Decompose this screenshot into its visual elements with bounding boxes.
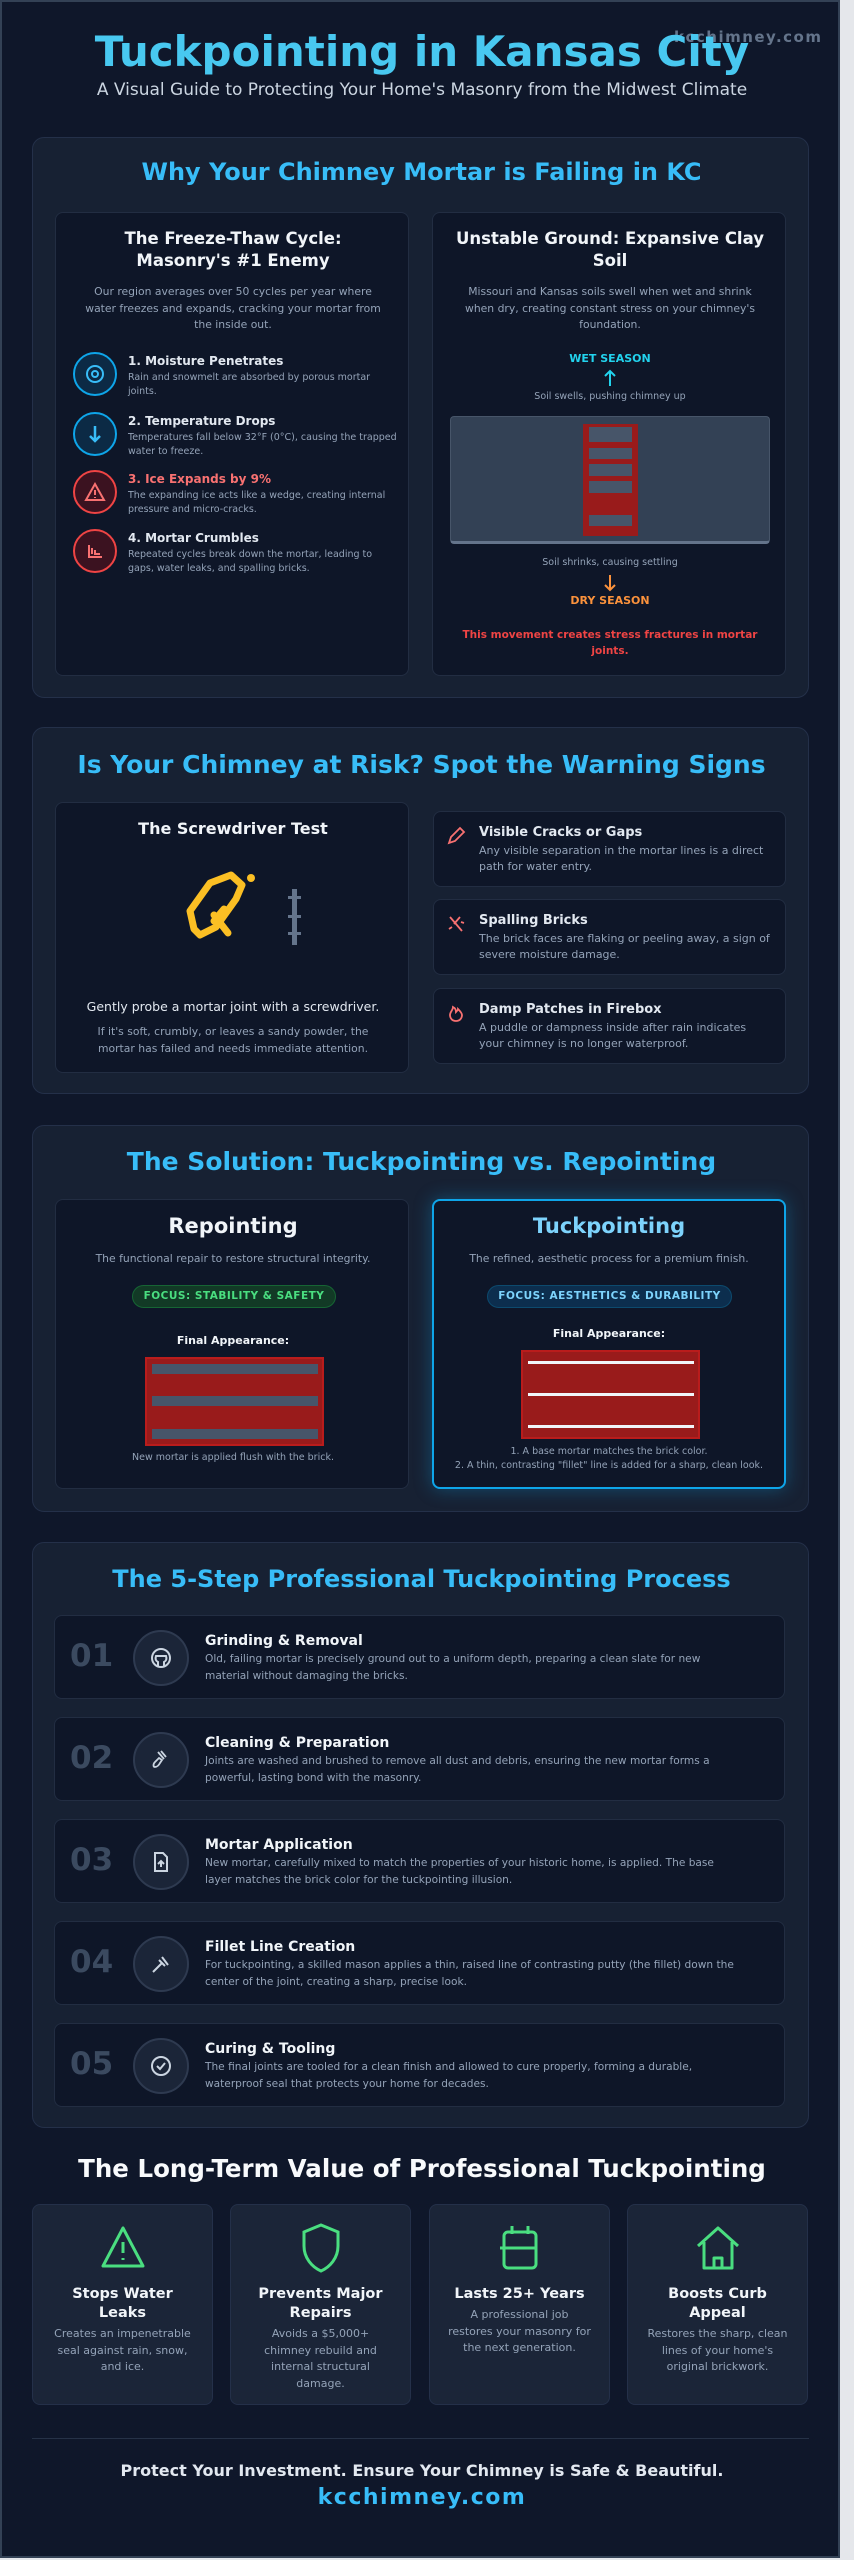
step 3 desc: The expanding ice acts like a wedge, creating internal pressure and micro-cracks. — [128, 490, 385, 515]
step 2 desc: Temperatures fall below 32°F (0°C), causing the trapped water to freeze. — [128, 432, 397, 457]
card: expansive clay — [432, 212, 786, 676]
badge: stability — [132, 1285, 336, 1308]
icon: grinder — [133, 1630, 189, 1686]
freeze-thaw description: Our region averages over 50 cycles per year where — [94, 285, 372, 298]
repointing title: Repointing — [168, 1214, 298, 1238]
screwdriver result: If it's soft, crumbly, or leaves a sandy powder, the — [98, 1025, 368, 1038]
step 4 desc: Repeated cycles break down the mortar, leading to gaps, water leaks, and spalling bricks. — [128, 549, 372, 574]
step 02: 02 — [70, 1740, 113, 1776]
icon: shield — [302, 2223, 340, 2273]
clay description — [465, 285, 755, 331]
clay description: when dry, creating constant stress on your chimney's — [465, 302, 755, 314]
benefit: curb appeal: lines of your home's — [662, 2344, 773, 2356]
card: freeze-thaw — [55, 212, 409, 676]
final appearance label: Final Appearance: — [553, 1327, 665, 1340]
benefit: water leaks: Stops Water — [72, 2286, 173, 2302]
freeze-thaw title: The Freeze-Thaw Cycle: — [124, 229, 342, 248]
step 4 title: 4. Mortar Crumbles — [128, 531, 259, 545]
icon: target — [73, 352, 117, 396]
heading: warning signs: Is Your Chimney at Risk? Spot the Warning Signs — [77, 750, 766, 779]
step 3 title: 3. Ice Expands by 9% — [128, 472, 271, 486]
heading: solution: The Solution: Tuckpointing vs. Repointing — [127, 1147, 716, 1176]
step 05 — [54, 2023, 785, 2107]
card: tuckpointing — [432, 1199, 786, 1489]
repointing desc: The functional repair to restore structural integrity. — [96, 1252, 370, 1265]
clay title: Unstable Ground: Expansive Clay — [456, 229, 764, 248]
stress warning: This movement creates stress fractures in mortar — [463, 629, 757, 641]
benefit: repairs: Prevents Major — [258, 2286, 383, 2302]
wet season label: WET SEASON — [569, 352, 651, 365]
clay description: Missouri and Kansas soils swell when wet and shrink — [468, 285, 752, 298]
step 05: 05 — [70, 2046, 113, 2082]
step 05: Curing & Tooling — [205, 2041, 335, 2057]
freeze-thaw title — [124, 229, 342, 270]
sign: spalling — [433, 899, 786, 975]
step 01: Old, failing mortar is precisely ground out to a uniform depth, preparing a clean slate for new material without damaging the bricks. — [205, 1653, 700, 1682]
icon: warning — [101, 2226, 144, 2268]
clay description: foundation. — [579, 318, 641, 331]
icon: broken — [448, 916, 464, 932]
arrow down — [604, 575, 616, 592]
arrow up — [604, 370, 616, 386]
sign: spalling: The brick faces are flaking or peeling away, a sign of severe moisture damage. — [479, 932, 770, 961]
panel: 5-step process — [32, 1542, 809, 2128]
heading: why failing: Why Your Chimney Mortar is Failing in KC — [141, 158, 702, 186]
benefit: water leaks — [32, 2204, 213, 2405]
brick: fillet lines — [521, 1350, 700, 1439]
card: repointing — [55, 1199, 409, 1489]
freeze-thaw description — [85, 285, 381, 331]
sign: cracks — [433, 811, 786, 887]
benefit: repairs: Repairs — [290, 2305, 351, 2321]
freeze-thaw description: the inside out. — [194, 318, 272, 331]
soil diagram — [450, 416, 770, 544]
benefit: water leaks: seal against rain, snow, — [57, 2344, 188, 2356]
heading: long-term value: The Long-Term Value of Professional Tuckpointing — [78, 2154, 766, 2183]
badge: aesthetics: FOCUS: AESTHETICS & DURABILITY — [498, 1290, 721, 1302]
sign: damp: Damp Patches in Firebox — [479, 1002, 662, 1017]
title: Tuckpointing in Kansas City — [95, 27, 749, 76]
step 03 — [54, 1819, 785, 1903]
sign: damp: A puddle or dampness inside after rain indicates your chimney is no longer waterproof. — [479, 1021, 746, 1050]
step 01: 01 — [70, 1638, 113, 1674]
icon: warning — [73, 470, 117, 514]
brick: flush mortar — [145, 1357, 324, 1446]
step 1 desc: Rain and snowmelt are absorbed by porous mortar joints. — [128, 372, 370, 397]
step 01: Grinding & Removal — [205, 1633, 363, 1649]
benefit: lasts — [429, 2204, 610, 2405]
benefit: lasts: the next generation. — [463, 2341, 576, 2354]
step 04: For tuckpointing, a skilled mason applies a thin, raised line of contrasting putty (the fillet) down the center of the joint, creating a sharp, precise look. — [205, 1959, 734, 1988]
subtitle: A Visual Guide to Protecting Your Home's Masonry from the Midwest Climate — [97, 80, 747, 100]
step 02: Cleaning & Preparation — [205, 1735, 389, 1751]
icon: tool — [133, 1936, 189, 1992]
icon: flame — [449, 1006, 463, 1022]
soil shrinks text: Soil shrinks, causing settling — [542, 557, 678, 568]
tuckpointing desc: The refined, aesthetic process for a premium finish. — [469, 1252, 749, 1265]
step 02 — [54, 1717, 785, 1801]
freeze-thaw description: water freezes and expands, cracking your mortar from — [85, 302, 381, 314]
stress warning: joints. — [591, 645, 629, 657]
benefit: lasts: restores your masonry for — [448, 2324, 591, 2338]
step 2 title: 2. Temperature Drops — [128, 414, 275, 428]
step 04: 04 — [70, 1944, 113, 1980]
screwdriver result: mortar has failed and needs immediate attention. — [98, 1042, 368, 1055]
chimney — [583, 424, 638, 536]
step 1 title: 1. Moisture Penetrates — [128, 354, 283, 368]
benefit: lasts: A professional job — [471, 2308, 568, 2321]
benefit: water leaks: Leaks — [99, 2305, 146, 2321]
panel: why mortar fails — [32, 137, 809, 698]
benefit: water leaks: and ice. — [101, 2360, 144, 2373]
step 01 — [54, 1615, 785, 1699]
final appearance label: Final Appearance: — [177, 1334, 289, 1347]
clay title — [456, 229, 764, 270]
benefit: repairs: chimney rebuild and — [264, 2344, 377, 2356]
benefit: curb appeal: original brickwork. — [667, 2360, 768, 2373]
icon: calendar — [500, 2226, 538, 2270]
icon: arrow down — [73, 412, 117, 456]
step 02: Joints are washed and brushed to remove all dust and debris, ensuring the new mortar forms a powerful, lasting bond with the masonry. — [205, 1755, 710, 1784]
icon: pencil — [448, 826, 466, 844]
benefit: repairs: Avoids a $5,000+ — [272, 2327, 369, 2340]
icon: brush — [133, 1732, 189, 1788]
benefit: lasts: Lasts 25+ Years — [454, 2286, 585, 2302]
sign: cracks: Any visible separation in the mortar lines is a direct path for water entry. — [479, 844, 763, 873]
sign: damp — [433, 988, 786, 1064]
benefit: water leaks: Creates an impenetrable — [54, 2327, 191, 2340]
benefit: curb appeal — [627, 2204, 808, 2405]
benefit: curb appeal: Appeal — [689, 2305, 746, 2321]
footer tagline: Protect Your Investment. Ensure Your Chimney is Safe & Beautiful. — [121, 2461, 723, 2480]
step 03: Mortar Application — [205, 1837, 353, 1853]
card: screwdriver test — [55, 802, 409, 1073]
badge: aesthetics — [487, 1285, 732, 1308]
clay title: Soil — [593, 251, 627, 270]
sign: cracks: Visible Cracks or Gaps — [479, 825, 642, 840]
icon: file upload — [133, 1834, 189, 1890]
freeze-thaw title: Masonry's #1 Enemy — [136, 251, 330, 270]
step 05: The final joints are tooled for a clean finish and allowed to cure properly, forming a durable, waterproof seal that protects your home for decades. — [205, 2061, 692, 2090]
watermark: kcchimney.com — [674, 28, 822, 46]
screwdriver instruction: Gently probe a mortar joint with a screwdriver. — [87, 999, 379, 1014]
repointing caption: New mortar is applied flush with the brick. — [132, 1452, 334, 1463]
heading: process: The 5-Step Professional Tuckpointing Process — [112, 1565, 731, 1593]
benefit: repairs: internal structural — [271, 2360, 370, 2373]
step 03: New mortar, carefully mixed to match the properties of your historic home, is applied. The base layer matches the brick color for the tuckpointing illusion. — [205, 1857, 714, 1886]
step 04 — [54, 1921, 785, 2005]
benefit: curb appeal: Restores the sharp, clean — [647, 2327, 788, 2340]
step 04: Fillet Line Creation — [205, 1939, 355, 1955]
icon: crumble — [73, 529, 117, 573]
footer url: kcchimney.com — [318, 2485, 526, 2510]
stress warning — [462, 629, 758, 657]
step 03: 03 — [70, 1842, 113, 1878]
benefit: repairs: damage. — [296, 2376, 345, 2390]
screwdriver title: The Screwdriver Test — [138, 819, 328, 838]
tuckpointing captions: 1. A base mortar matches the brick color. — [510, 1446, 708, 1457]
panel: warning signs — [32, 727, 809, 1094]
icon: house — [697, 2226, 739, 2270]
benefit: repairs — [230, 2204, 411, 2405]
tuckpointing captions: 2. A thin, contrasting "fillet" line is added for a sharp, clean look. — [455, 1460, 763, 1471]
icon: check — [133, 2038, 189, 2094]
benefit: curb appeal: Boosts Curb — [668, 2286, 767, 2302]
soil swells text: Soil swells, pushing chimney up — [534, 391, 686, 402]
tuckpointing captions — [455, 1446, 763, 1471]
tuckpointing title: Tuckpointing — [533, 1214, 685, 1238]
dry season label: DRY SEASON — [570, 594, 650, 607]
icon: screwdriver — [186, 872, 301, 945]
sign: spalling: Spalling Bricks — [479, 913, 588, 928]
badge: stability: FOCUS: STABILITY & SAFETY — [144, 1290, 324, 1302]
panel: solution — [32, 1125, 809, 1512]
screwdriver result — [98, 1025, 368, 1055]
